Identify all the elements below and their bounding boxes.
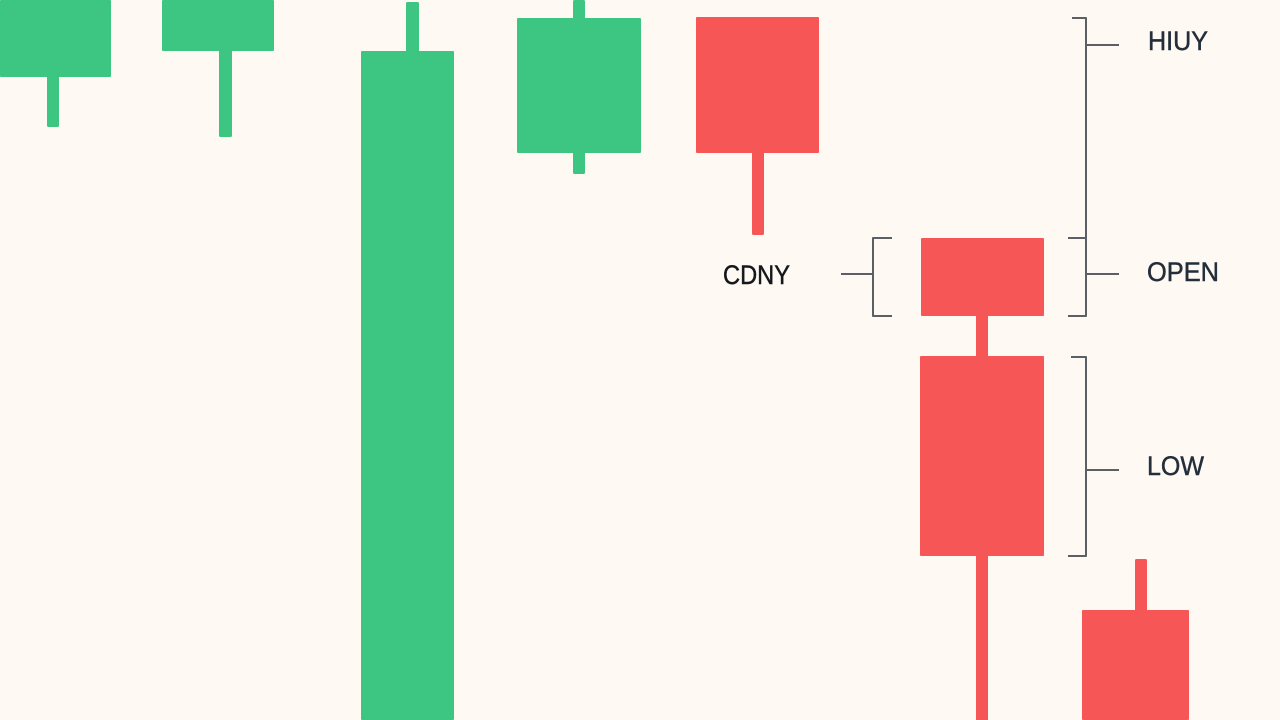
candle: red bottom right	[1082, 559, 1189, 720]
label: LOW bracket	[1068, 357, 1119, 556]
label: CDNY: CDNY	[723, 260, 790, 290]
label: OPEN: OPEN	[1147, 257, 1219, 287]
candle: green 4	[517, 0, 641, 174]
label: LOW: LOW	[1147, 451, 1204, 481]
label: left bracket	[841, 238, 892, 316]
label: OPEN bracket right	[1068, 238, 1119, 316]
candle: red 1	[696, 17, 819, 235]
candle: green 1	[0, 0, 111, 127]
candle: green 3 tall	[361, 2, 454, 720]
label: HIGH bracket	[1072, 18, 1119, 238]
label: HIUY: HIUY	[1148, 26, 1208, 56]
candle: red open	[921, 238, 1044, 360]
candle: green 2	[162, 0, 274, 137]
candle: red low	[920, 356, 1044, 720]
